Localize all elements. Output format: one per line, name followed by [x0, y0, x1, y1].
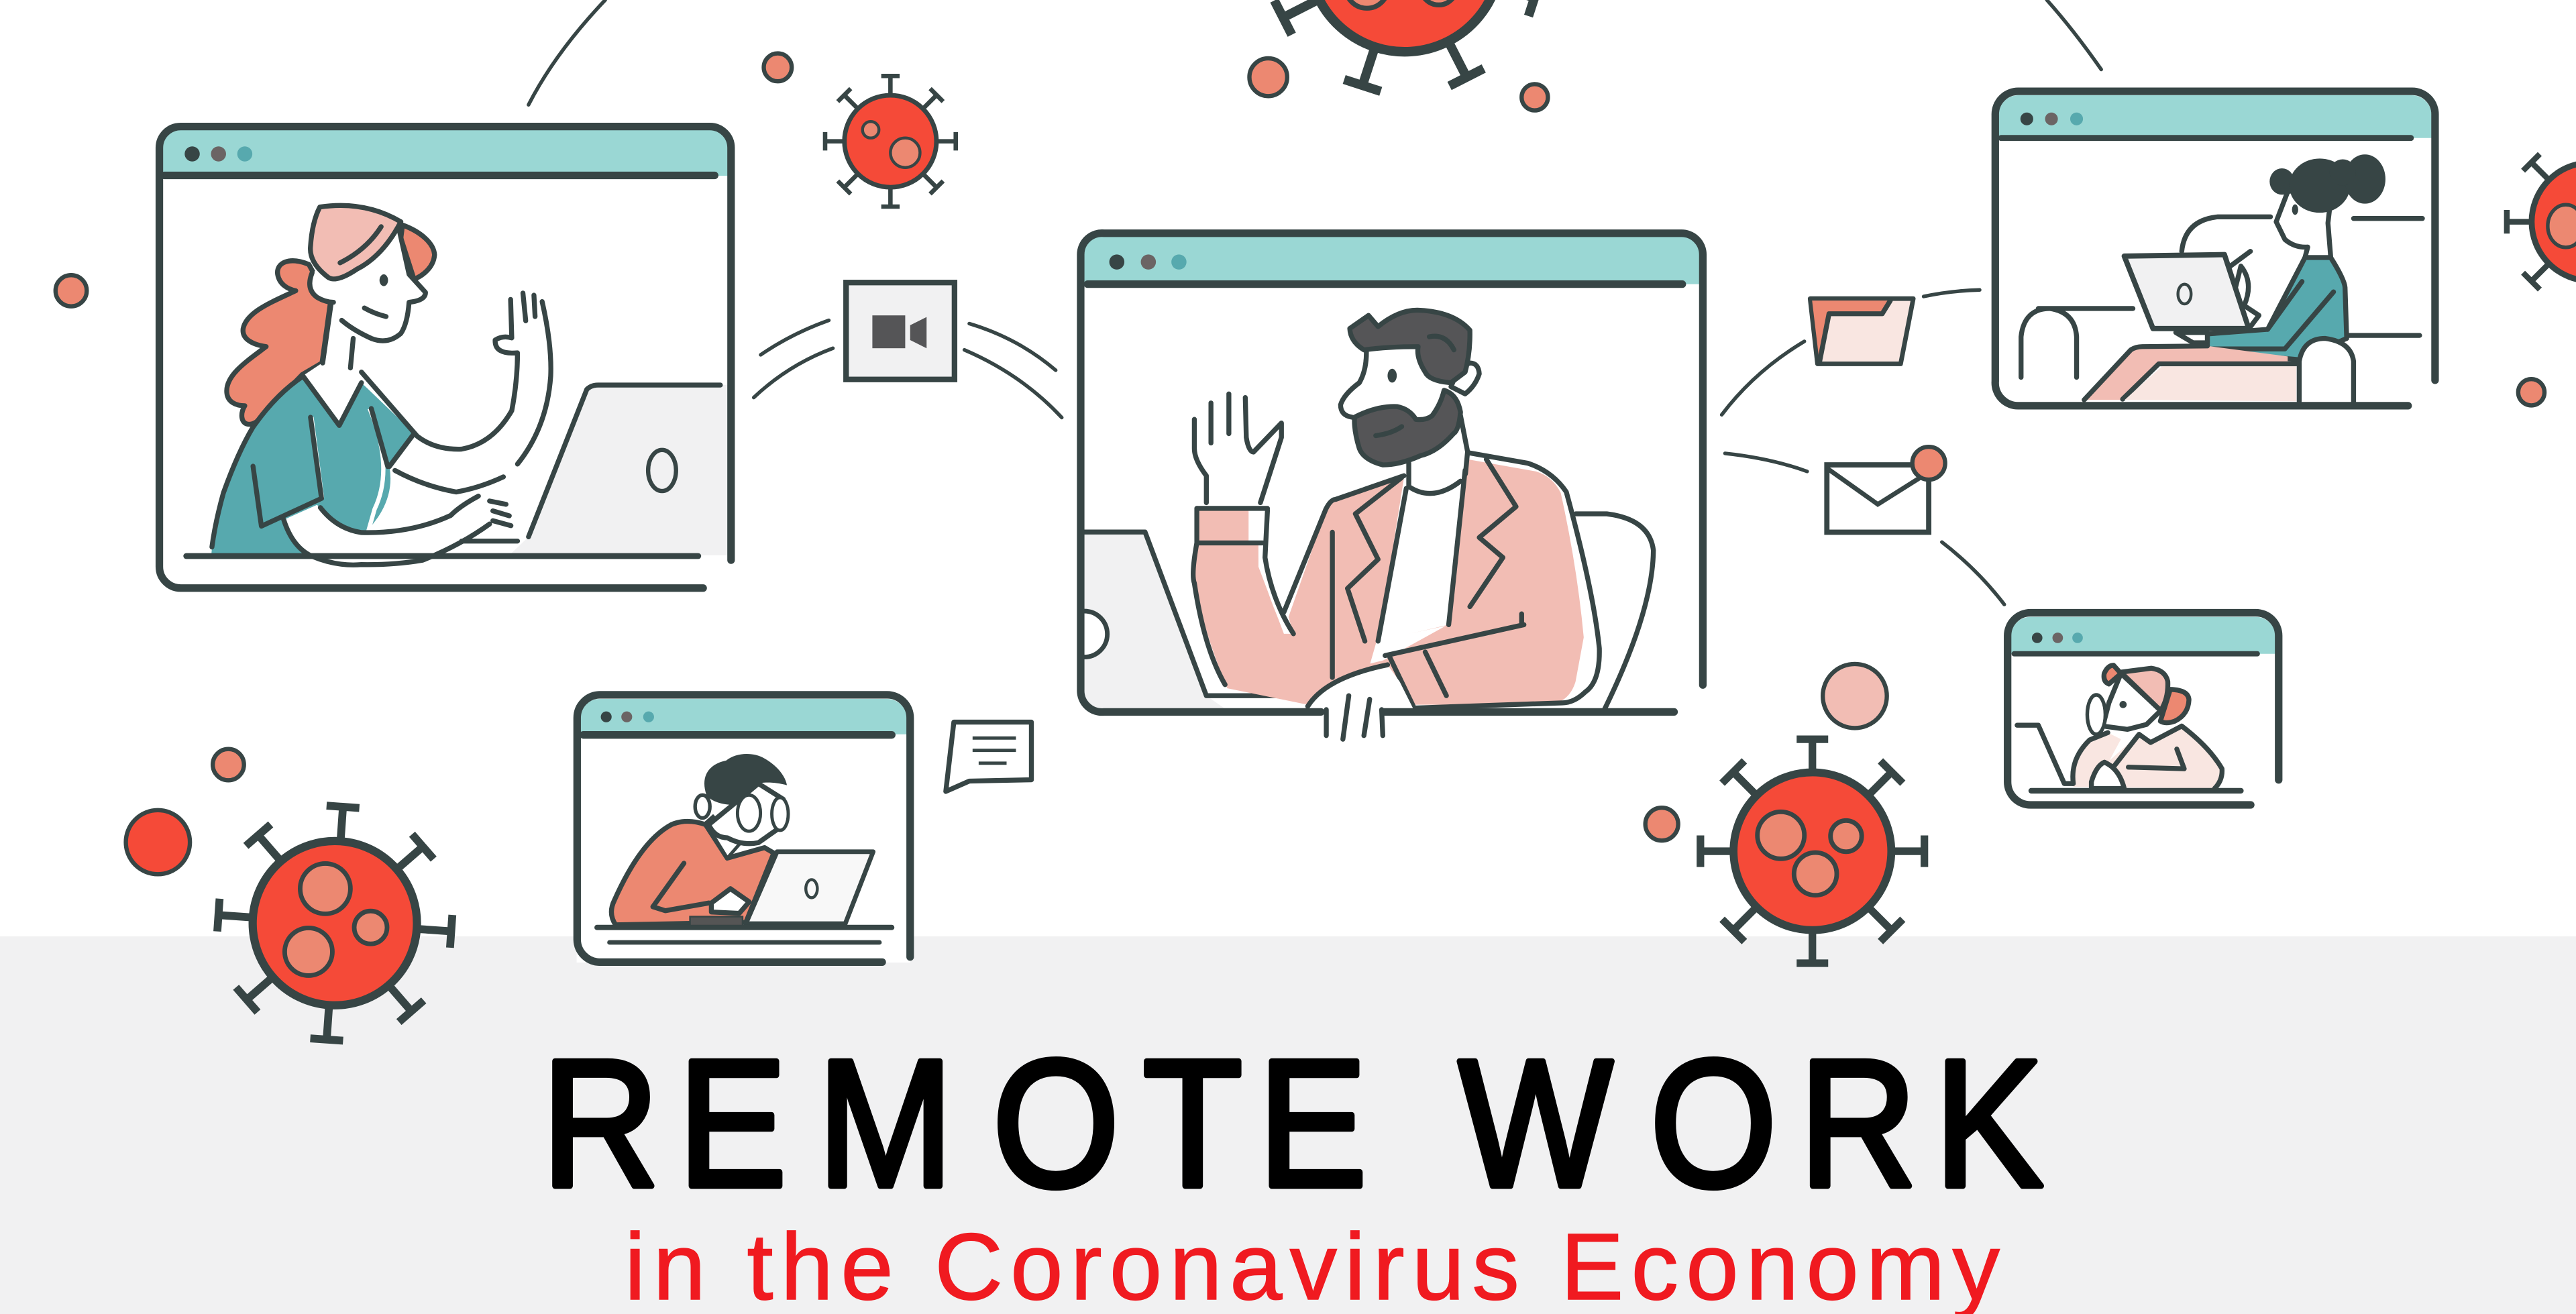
- window frame: [1995, 91, 2435, 406]
- desk line: [186, 555, 698, 557]
- laptop: [690, 852, 873, 926]
- decorative dots: [56, 54, 2544, 874]
- heading: title: REMOTE WORK: [541, 1022, 2043, 1225]
- couch: [2021, 217, 2422, 378]
- icon: video camera: [846, 282, 955, 380]
- window header: [1998, 95, 2432, 138]
- panel: woman waving at laptop: [160, 127, 731, 588]
- grey title band: [0, 936, 2576, 1314]
- woman figure: [211, 205, 551, 565]
- woman figure: [2084, 154, 2385, 401]
- window frame: [2008, 612, 2279, 805]
- man figure: [611, 754, 788, 925]
- icon: chat bubble: [946, 722, 1031, 791]
- icon: virus bottom left: [211, 799, 460, 1048]
- connector arcs: [529, 0, 2101, 604]
- man figure: [1193, 310, 1599, 739]
- panel: man with glasses at laptop: [577, 695, 910, 963]
- laptop: [2125, 255, 2249, 329]
- laptop: [2017, 725, 2114, 783]
- window header: [1084, 237, 1699, 284]
- icon: virus top centre: [1233, 0, 1576, 127]
- window header: [162, 129, 728, 176]
- couch armrest: [2299, 338, 2353, 402]
- panel: woman on couch with laptop: [1995, 91, 2435, 406]
- window frame: [160, 127, 731, 588]
- icon: small virus top: [825, 76, 956, 207]
- phone woman figure: [2073, 665, 2222, 789]
- window header: [2011, 617, 2275, 654]
- icon: envelope with notification: [1827, 447, 1945, 532]
- panel: woman on phone: [2008, 612, 2279, 805]
- icon: virus right edge: [2507, 138, 2576, 306]
- icon: folder: [1810, 298, 1913, 364]
- laptop: [1084, 532, 1303, 708]
- illustration: [56, 0, 2576, 1048]
- window frame: [1081, 233, 1703, 712]
- laptop: [509, 385, 728, 555]
- icon: virus bottom right: [1701, 739, 1925, 963]
- window header: [580, 699, 907, 734]
- window frame: [577, 695, 910, 962]
- chair: [1576, 514, 1654, 710]
- panel: man waving: [1081, 233, 1703, 739]
